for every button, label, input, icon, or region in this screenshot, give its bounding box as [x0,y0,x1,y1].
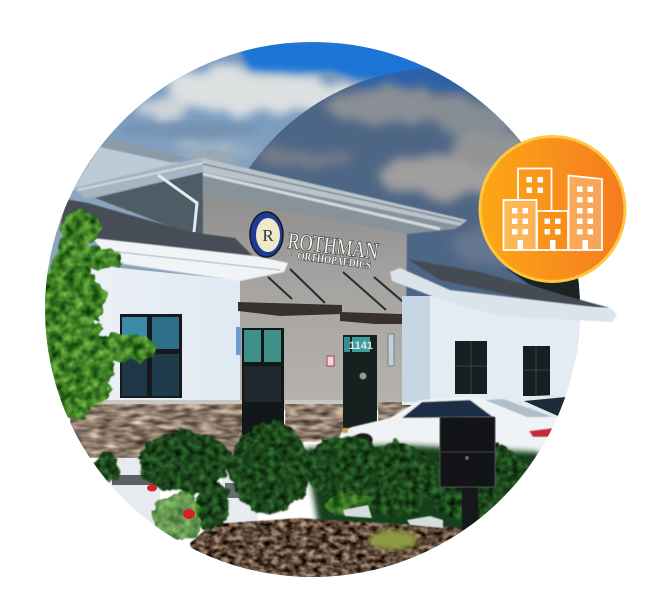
second parked car [520,395,560,418]
second door with suite number [343,335,377,430]
gable fascia [73,157,467,234]
white left wing wall [90,267,240,404]
red flowers [147,484,195,519]
mulch bed [189,517,468,577]
hazard placard [327,356,334,366]
main entrance door [242,328,284,436]
background roof wing [72,137,240,192]
infographic canvas [45,42,626,577]
white debris on mulch [343,505,443,528]
drop box on post [440,417,495,530]
grey facade [203,192,407,410]
stone base [70,400,412,458]
sky with clouds [40,40,585,300]
right windows [455,341,550,396]
wall lamp [388,334,394,366]
clinic name sign: ROTHMAN [286,228,380,264]
awning right [340,312,402,324]
suite number: 1141 [349,340,373,352]
lighter flowering shrubs [154,493,372,541]
clinic name sign: & [287,251,292,258]
white parked car [338,397,557,450]
upper left soffit [95,172,203,240]
clinic logo sign [250,212,283,257]
clinic logo sign: R [262,226,274,245]
shingle roof left [60,199,255,258]
right wing wall [402,296,585,405]
icon: buildings [504,168,602,250]
awning left [238,302,342,316]
white eave trim [93,238,288,281]
awning struts [267,268,402,311]
shrubs [91,422,535,529]
dark tree behind right wing [506,268,582,302]
downspout [158,175,197,232]
dense hedge backdrop [305,445,540,535]
right wing eave extending past circle [390,268,617,322]
dark translucent circle overlay [248,68,580,360]
badge: orange circle with city buildings icon [480,136,625,282]
left window [120,314,182,398]
clinic name sign: ORTHOPAEDICS [297,250,372,272]
accessibility sign [236,327,241,355]
right wing dark shingles [407,259,610,308]
pavement [108,458,258,527]
tree foliage at left [30,210,156,416]
